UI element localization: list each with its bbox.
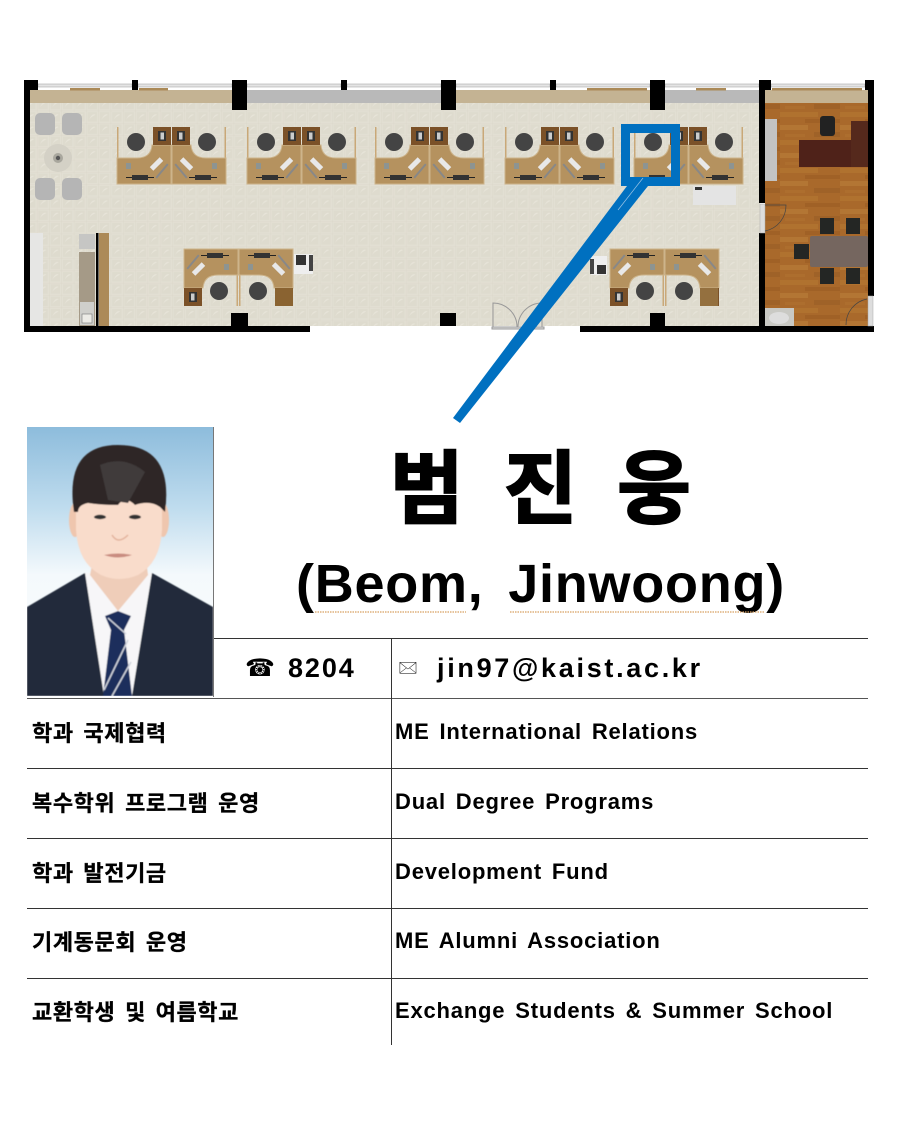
duty row 1 Korean: 학과 국제협력 xyxy=(32,721,167,746)
portrait photo xyxy=(27,427,213,696)
duty row 2 English: Dual Degree Programs xyxy=(395,789,654,814)
spell-check underline xyxy=(315,611,764,613)
office furniture xyxy=(760,116,873,326)
printers xyxy=(294,186,736,275)
email: jin97@kaist.ac.kr xyxy=(437,653,703,683)
workstation desks, bottom row xyxy=(184,249,719,306)
phone extension: ☎ xyxy=(245,654,275,682)
duty row 1 English: ME International Relations xyxy=(395,719,698,744)
duty row 5 Korean: 교환학생 및 여름학교 xyxy=(32,1000,239,1025)
lounge chairs and table xyxy=(35,113,82,200)
name in Korean: 범진웅 xyxy=(390,445,731,534)
floor xyxy=(30,90,760,326)
walls and columns xyxy=(24,80,874,332)
workstation desks, top row xyxy=(117,127,743,184)
office wood floor xyxy=(765,90,868,326)
tie xyxy=(103,611,132,696)
highlight box and pointer line xyxy=(453,124,680,423)
office floor plan xyxy=(24,80,874,423)
kitchen xyxy=(30,233,109,326)
duty row 3 Korean: 학과 발전기금 xyxy=(32,861,167,886)
window strips xyxy=(38,84,865,87)
phone extension xyxy=(245,653,356,683)
name in English: (Beom, Jinwoong) xyxy=(296,554,785,614)
entrance doors xyxy=(492,303,544,329)
table grid lines xyxy=(27,427,868,1045)
ears and face xyxy=(69,503,81,537)
hair xyxy=(72,445,166,512)
wall counters xyxy=(30,88,868,103)
eyes, nose, mouth xyxy=(94,515,106,519)
duty row 2 Korean: 복수학위 프로그램 운영 xyxy=(32,791,260,816)
duty row 4 Korean: 기계동문회 운영 xyxy=(32,930,188,955)
phone extension: 8204 xyxy=(288,653,356,683)
email: 🖂 xyxy=(398,658,418,678)
duty row 3 English: Development Fund xyxy=(395,859,609,884)
neck xyxy=(90,560,148,611)
shirt xyxy=(85,573,152,696)
duty row 4 English: ME Alumni Association xyxy=(395,928,661,953)
duty row 5 English: Exchange Students & Summer School xyxy=(395,998,833,1023)
suit xyxy=(27,573,104,696)
